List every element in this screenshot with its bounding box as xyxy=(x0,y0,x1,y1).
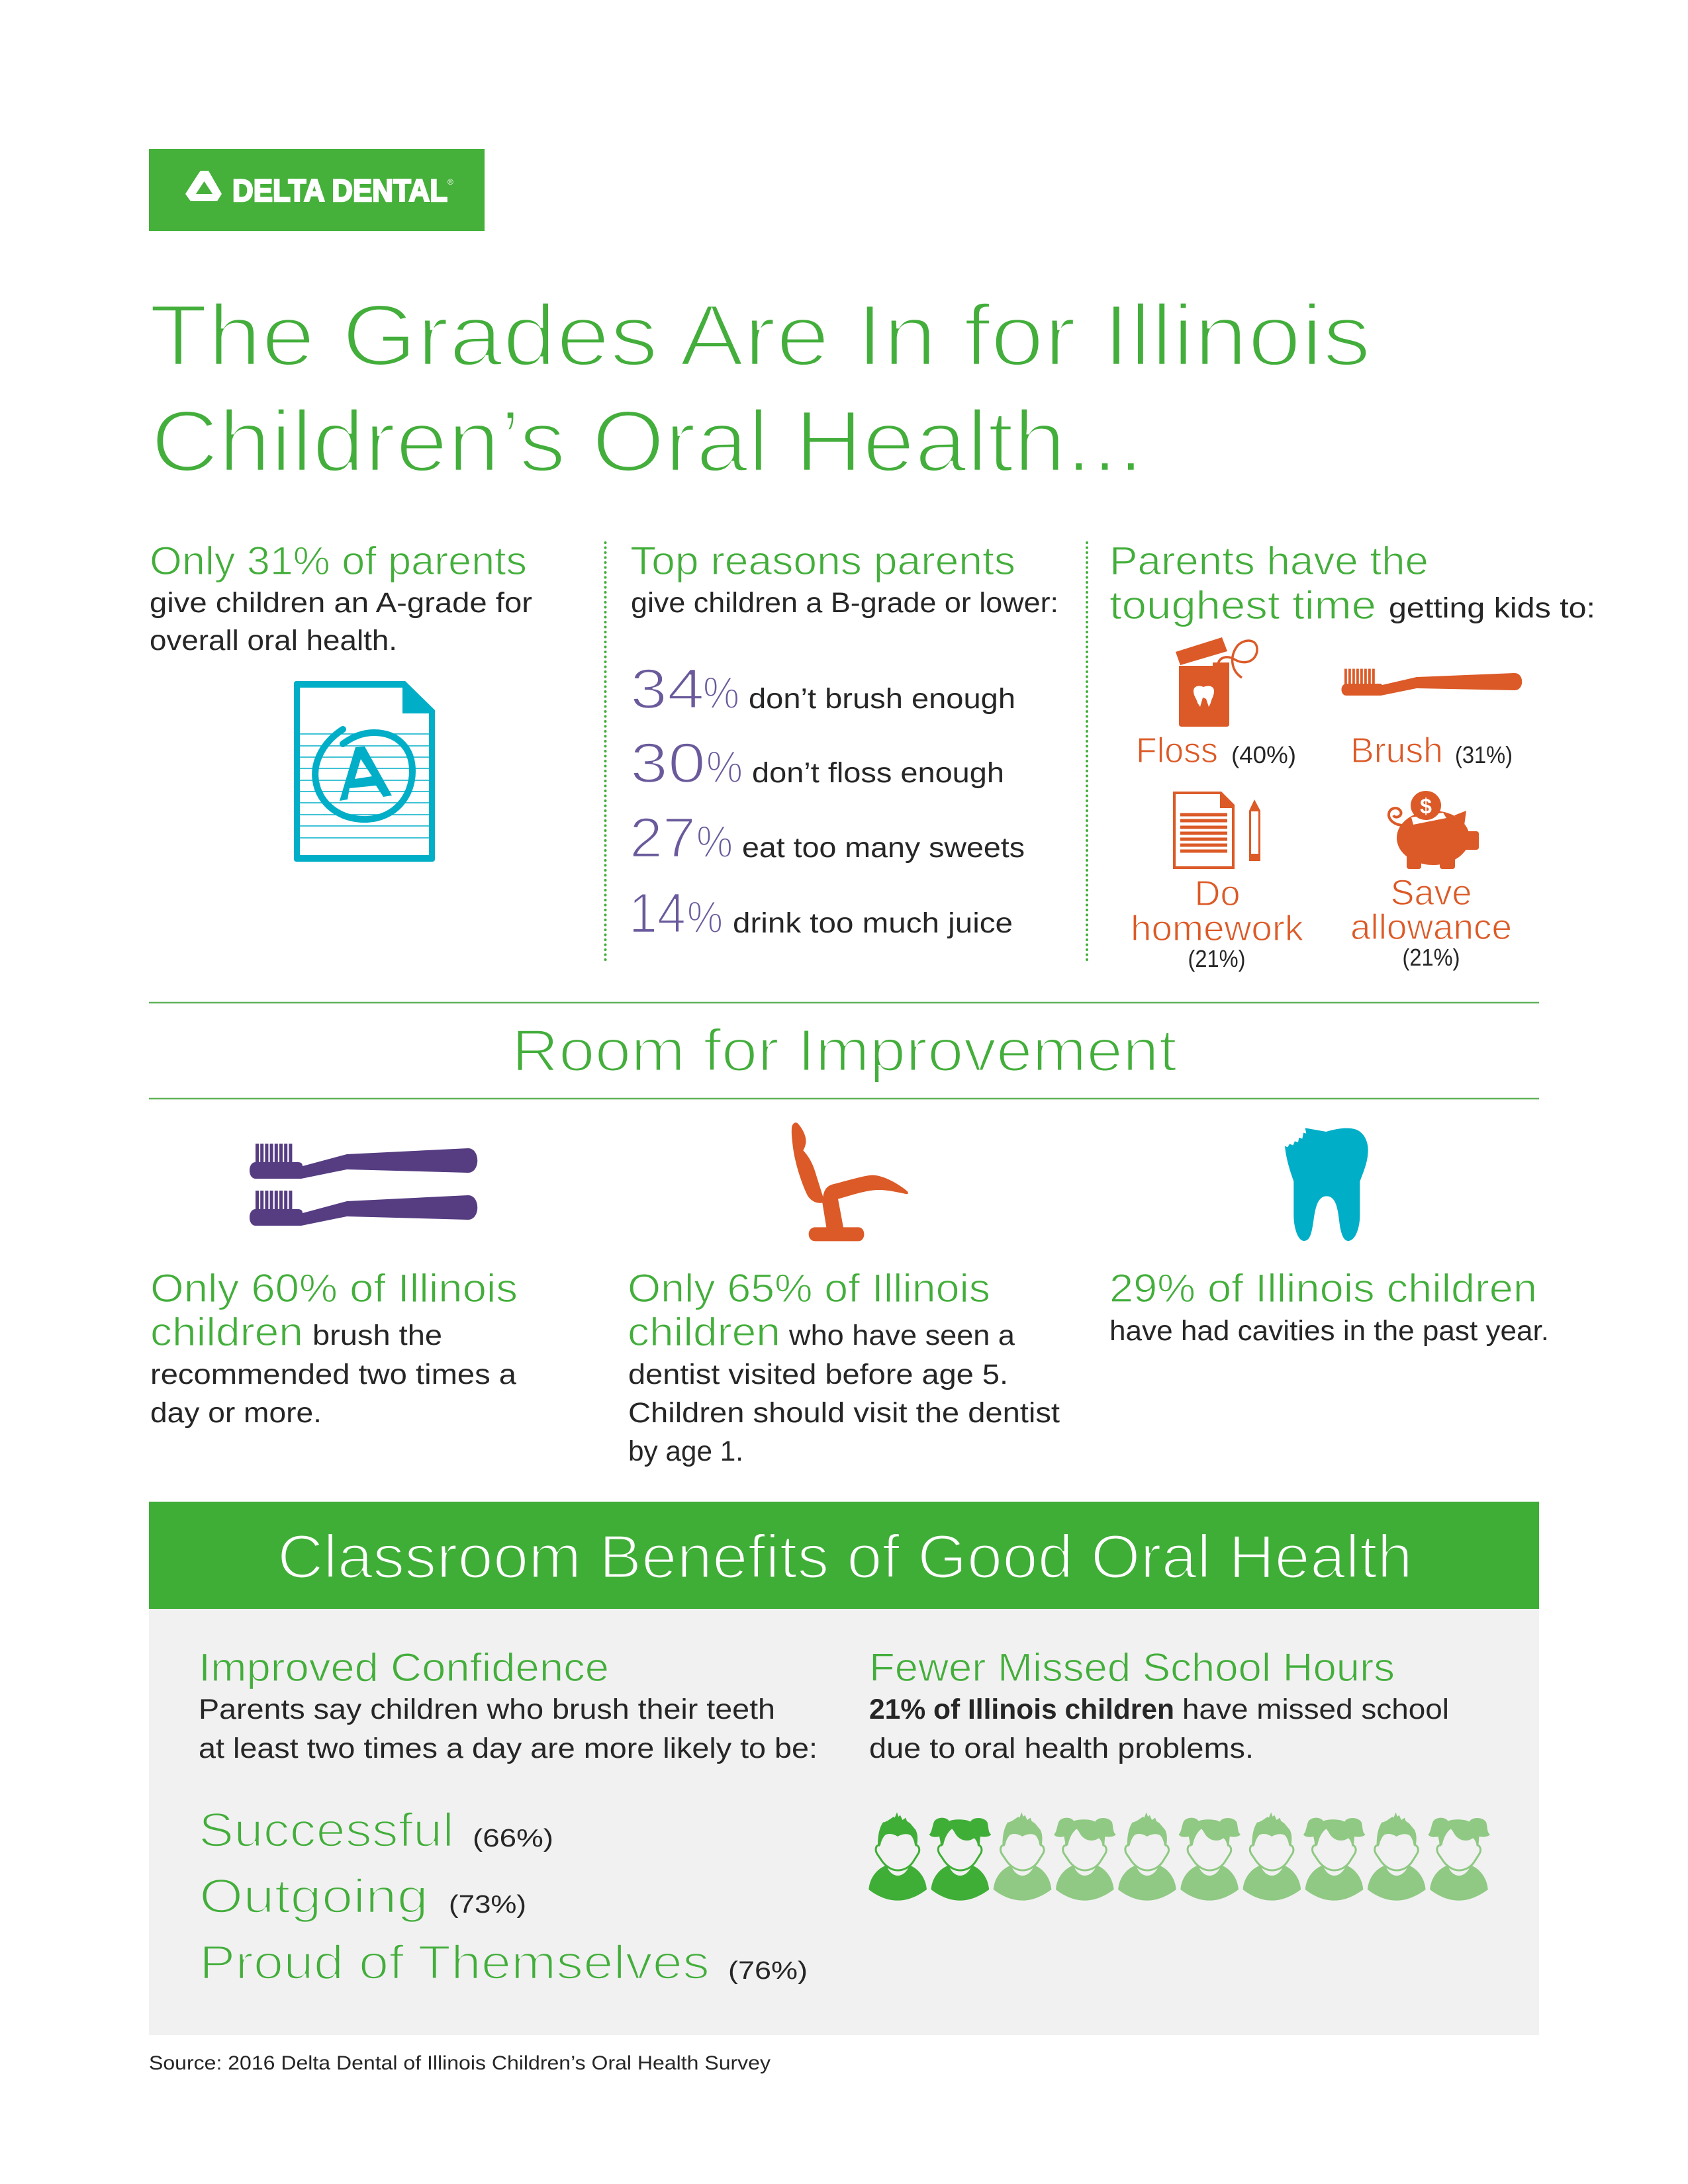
icon: toothbrush xyxy=(1341,673,1522,696)
panel: top reasons xyxy=(629,539,1058,945)
text: confidence description: at least two times a day are more likely to be: xyxy=(199,1733,818,1764)
icon: floss box xyxy=(1176,637,1257,727)
heading: only 65%: children xyxy=(628,1310,780,1354)
stat: proud of themselves: Proud of Themselves xyxy=(199,1936,710,1989)
stat: 30%: don’t floss enough xyxy=(752,757,1004,789)
text: dentist description xyxy=(628,1320,1060,1467)
panel: brushing xyxy=(150,1148,518,1429)
divider xyxy=(604,543,606,962)
stat: 27% xyxy=(630,807,1025,870)
label: brush: (31%) xyxy=(1455,741,1513,768)
text: missed school description xyxy=(869,1694,1449,1764)
stat: 27%: eat too many sweets xyxy=(742,832,1025,864)
text: brushing description: recommended two times a xyxy=(150,1359,516,1390)
divider xyxy=(1086,543,1088,962)
heading: only 65%: Only 65% of Illinois xyxy=(628,1266,990,1310)
stat: successful xyxy=(199,1804,553,1857)
label: save allowance: allowance xyxy=(1350,907,1512,947)
heading: 29%: 29% of Illinois children xyxy=(1109,1266,1537,1310)
text: brushing description: brush the xyxy=(312,1320,442,1351)
label: save allowance xyxy=(1350,873,1512,971)
heading: parents have the toughest time: getting kids to: xyxy=(1389,592,1595,624)
heading: only 60%: children xyxy=(150,1310,303,1354)
stat: 14%: drink too much juice xyxy=(733,907,1013,939)
title: Children’s Oral Health... xyxy=(151,392,1144,490)
heading: room for improvement: Room for Improvement xyxy=(512,1018,1177,1084)
text: dentist description: dentist visited before age 5. xyxy=(628,1359,1008,1390)
icon: dental chair xyxy=(792,1122,908,1241)
text: dentist description: by age 1. xyxy=(628,1435,743,1467)
label: floss xyxy=(1136,731,1296,770)
icon: graded paper xyxy=(294,681,435,862)
text: brushing description xyxy=(150,1320,516,1429)
stat: 14%: % xyxy=(687,892,723,942)
text: A-grade description xyxy=(150,587,532,657)
icon: two toothbrushes xyxy=(250,1148,477,1226)
text: B-grade description: give children a B-grade or lower: xyxy=(631,587,1058,619)
label: brush: Brush xyxy=(1350,731,1443,770)
stat: 34%: don’t brush enough xyxy=(749,683,1015,715)
logo: Delta Dental: ® xyxy=(447,177,453,187)
stat: outgoing: (73%) xyxy=(449,1891,526,1919)
heading: only 65% xyxy=(628,1266,990,1354)
title xyxy=(149,287,1371,490)
heading: parents have the toughest time: Parents have the xyxy=(1109,539,1429,583)
stat: 30%: 30 xyxy=(630,732,706,795)
stat: 14% xyxy=(629,882,1013,945)
icon: piggy bank xyxy=(1389,791,1479,869)
pictogram: 2 of 10 children xyxy=(868,1812,1490,1901)
label: do homework: Do xyxy=(1194,874,1241,913)
stat: 27%: 27 xyxy=(630,807,696,870)
stat: 34%: % xyxy=(703,668,739,718)
label: floss: (40%) xyxy=(1231,741,1296,768)
heading band xyxy=(149,1502,1539,1609)
stat: outgoing xyxy=(199,1870,526,1923)
label: do homework xyxy=(1131,874,1304,972)
panel: toughest time xyxy=(1109,539,1595,972)
source note: Source: 2016 Delta Dental of Illinois Children’s Oral Health Survey xyxy=(149,2052,771,2074)
title: The Grades Are In for Illinois xyxy=(149,287,1371,384)
text: missed school description: have missed school xyxy=(1182,1694,1449,1725)
text: confidence description: Parents say children who brush their teeth xyxy=(199,1694,775,1725)
stat: outgoing: Outgoing xyxy=(199,1870,428,1923)
stat: successful: (66%) xyxy=(473,1825,553,1852)
stat: proud of themselves: (76%) xyxy=(728,1957,808,1985)
icon: chipped tooth xyxy=(1285,1128,1368,1241)
text: missed school description: due to oral health problems. xyxy=(869,1733,1254,1764)
panel: cavities xyxy=(1109,1128,1549,1347)
panel: classroom benefits xyxy=(149,1502,1539,2035)
text: A-grade description: overall oral health. xyxy=(150,625,397,657)
heading: top reasons: Top reasons parents xyxy=(630,539,1015,583)
text: cavities description: have had cavities in the past year. xyxy=(1109,1315,1549,1347)
label: do homework: homework xyxy=(1131,909,1304,948)
heading: parents have the toughest time xyxy=(1109,539,1595,627)
icon: homework xyxy=(1173,792,1260,869)
logo: Delta Dental xyxy=(149,149,485,231)
heading band: Classroom Benefits of Good Oral Health xyxy=(277,1522,1413,1591)
panel: dentist xyxy=(628,1122,1060,1467)
heading: only 60% xyxy=(150,1266,518,1354)
text: brushing description: day or more. xyxy=(150,1397,322,1429)
text: dentist description: who have seen a xyxy=(788,1320,1015,1351)
panel background xyxy=(149,1609,1539,2035)
label: save allowance: (21%) xyxy=(1402,944,1460,971)
section: improved confidence xyxy=(199,1645,818,1989)
label: save allowance: Save xyxy=(1390,873,1472,913)
heading: improved confidence: Improved Confidence xyxy=(199,1645,609,1690)
label: brush xyxy=(1350,731,1513,770)
section: fewer missed school hours xyxy=(868,1645,1490,1901)
stat: 30% xyxy=(630,732,1004,795)
label: do homework: (21%) xyxy=(1188,945,1246,972)
heading: only 60%: Only 60% of Illinois xyxy=(150,1266,518,1310)
stat: 27%: % xyxy=(696,817,733,867)
text: confidence description xyxy=(199,1694,818,1764)
stat: 34%: 34 xyxy=(630,658,704,721)
stat: 14%: 14 xyxy=(629,882,686,945)
icon: piggy bank: $ xyxy=(1420,794,1432,818)
logo: Delta Dental: DELTA DENTAL xyxy=(232,173,447,208)
heading: only 31%: Only 31% of parents xyxy=(150,539,527,583)
stat: successful: Successful xyxy=(199,1804,454,1857)
heading: parents have the toughest time: toughest time xyxy=(1109,583,1376,627)
label: floss: Floss xyxy=(1136,731,1218,770)
text: missed school description: 21% of Illinois children xyxy=(869,1694,1174,1725)
text: dentist description: Children should visit the dentist xyxy=(628,1397,1060,1429)
stat: 34% xyxy=(630,658,1015,721)
text: A-grade description: give children an A-grade for xyxy=(150,587,532,619)
panel: A-grade parents xyxy=(150,539,532,862)
heading: fewer missed school hours: Fewer Missed School Hours xyxy=(869,1645,1395,1690)
stat: 30%: % xyxy=(706,742,743,792)
